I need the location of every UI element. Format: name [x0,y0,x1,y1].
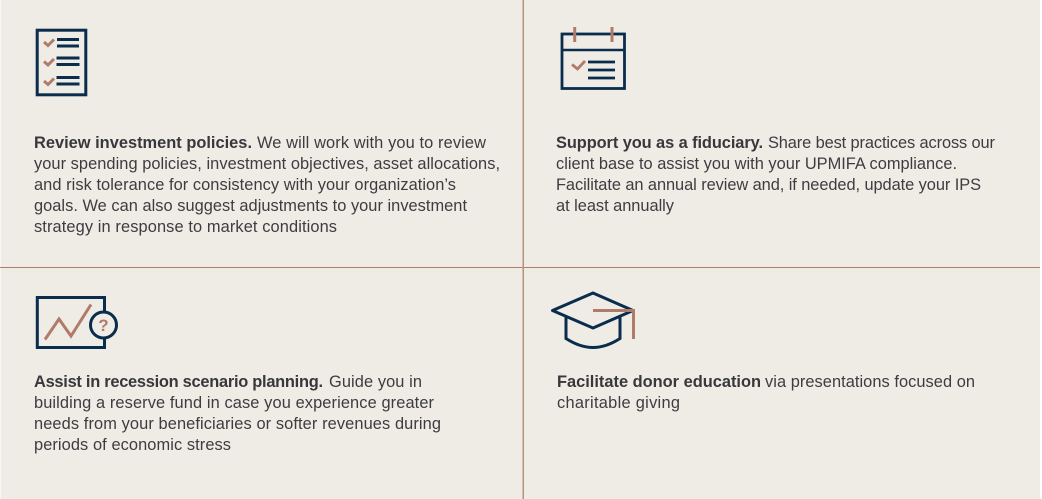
text: facilitate donor education: charitable giving [557,394,680,412]
text: facilitate donor education: via presentations focused on [765,373,975,391]
text: support you as a fiduciary: client base to assist you with your UPMIFA compliance. [556,155,957,173]
text: review investment policies: and risk tolerance for consistency with your organization’s [34,176,456,194]
text: assist in recession scenario planning: Guide you in [329,373,422,391]
icon: graduation cap [552,293,634,348]
text: assist in recession scenario planning: Assist in recession scenario planning. [34,373,323,391]
text: support you as a fiduciary: at least annually [556,197,675,215]
text: support you as a fiduciary: Support you as a fiduciary. [556,134,763,152]
text: facilitate donor education: Facilitate donor education [557,373,761,391]
panel: support you as a fiduciary [556,27,996,215]
panel: assist in recession scenario planning [34,298,441,454]
text: support you as a fiduciary [556,134,996,215]
text: assist in recession scenario planning [34,373,441,454]
panel: facilitate donor education [552,293,975,412]
panel: review investment policies [34,30,500,236]
text: facilitate donor education [557,373,975,412]
text: review investment policies: goals. We can also suggest adjustments to your investment [34,197,467,215]
text: assist in recession scenario planning: needs from your beneficiaries or softer revenues during [34,415,441,433]
text: review investment policies: your spending policies, investment objectives, asset allocations, [34,155,500,173]
text: assist in recession scenario planning: periods of economic stress [34,436,231,454]
icon: calendar [562,27,624,88]
text: support you as a fiduciary: Facilitate an annual review and, if needed, update your IPS [556,176,981,194]
icon: chart with question mark: ? [98,316,109,335]
icon: checklist document [37,30,86,95]
text: support you as a fiduciary: Share best practices across our [768,134,996,152]
text: review investment policies: We will work with you to review [257,134,486,152]
text: review investment policies [34,134,500,236]
text: assist in recession scenario planning: building a reserve fund in case you experience greater [34,394,435,412]
text: review investment policies: strategy in response to market conditions [34,218,337,236]
text: review investment policies: Review investment policies. [34,134,252,152]
icon: chart with question mark [37,298,116,348]
